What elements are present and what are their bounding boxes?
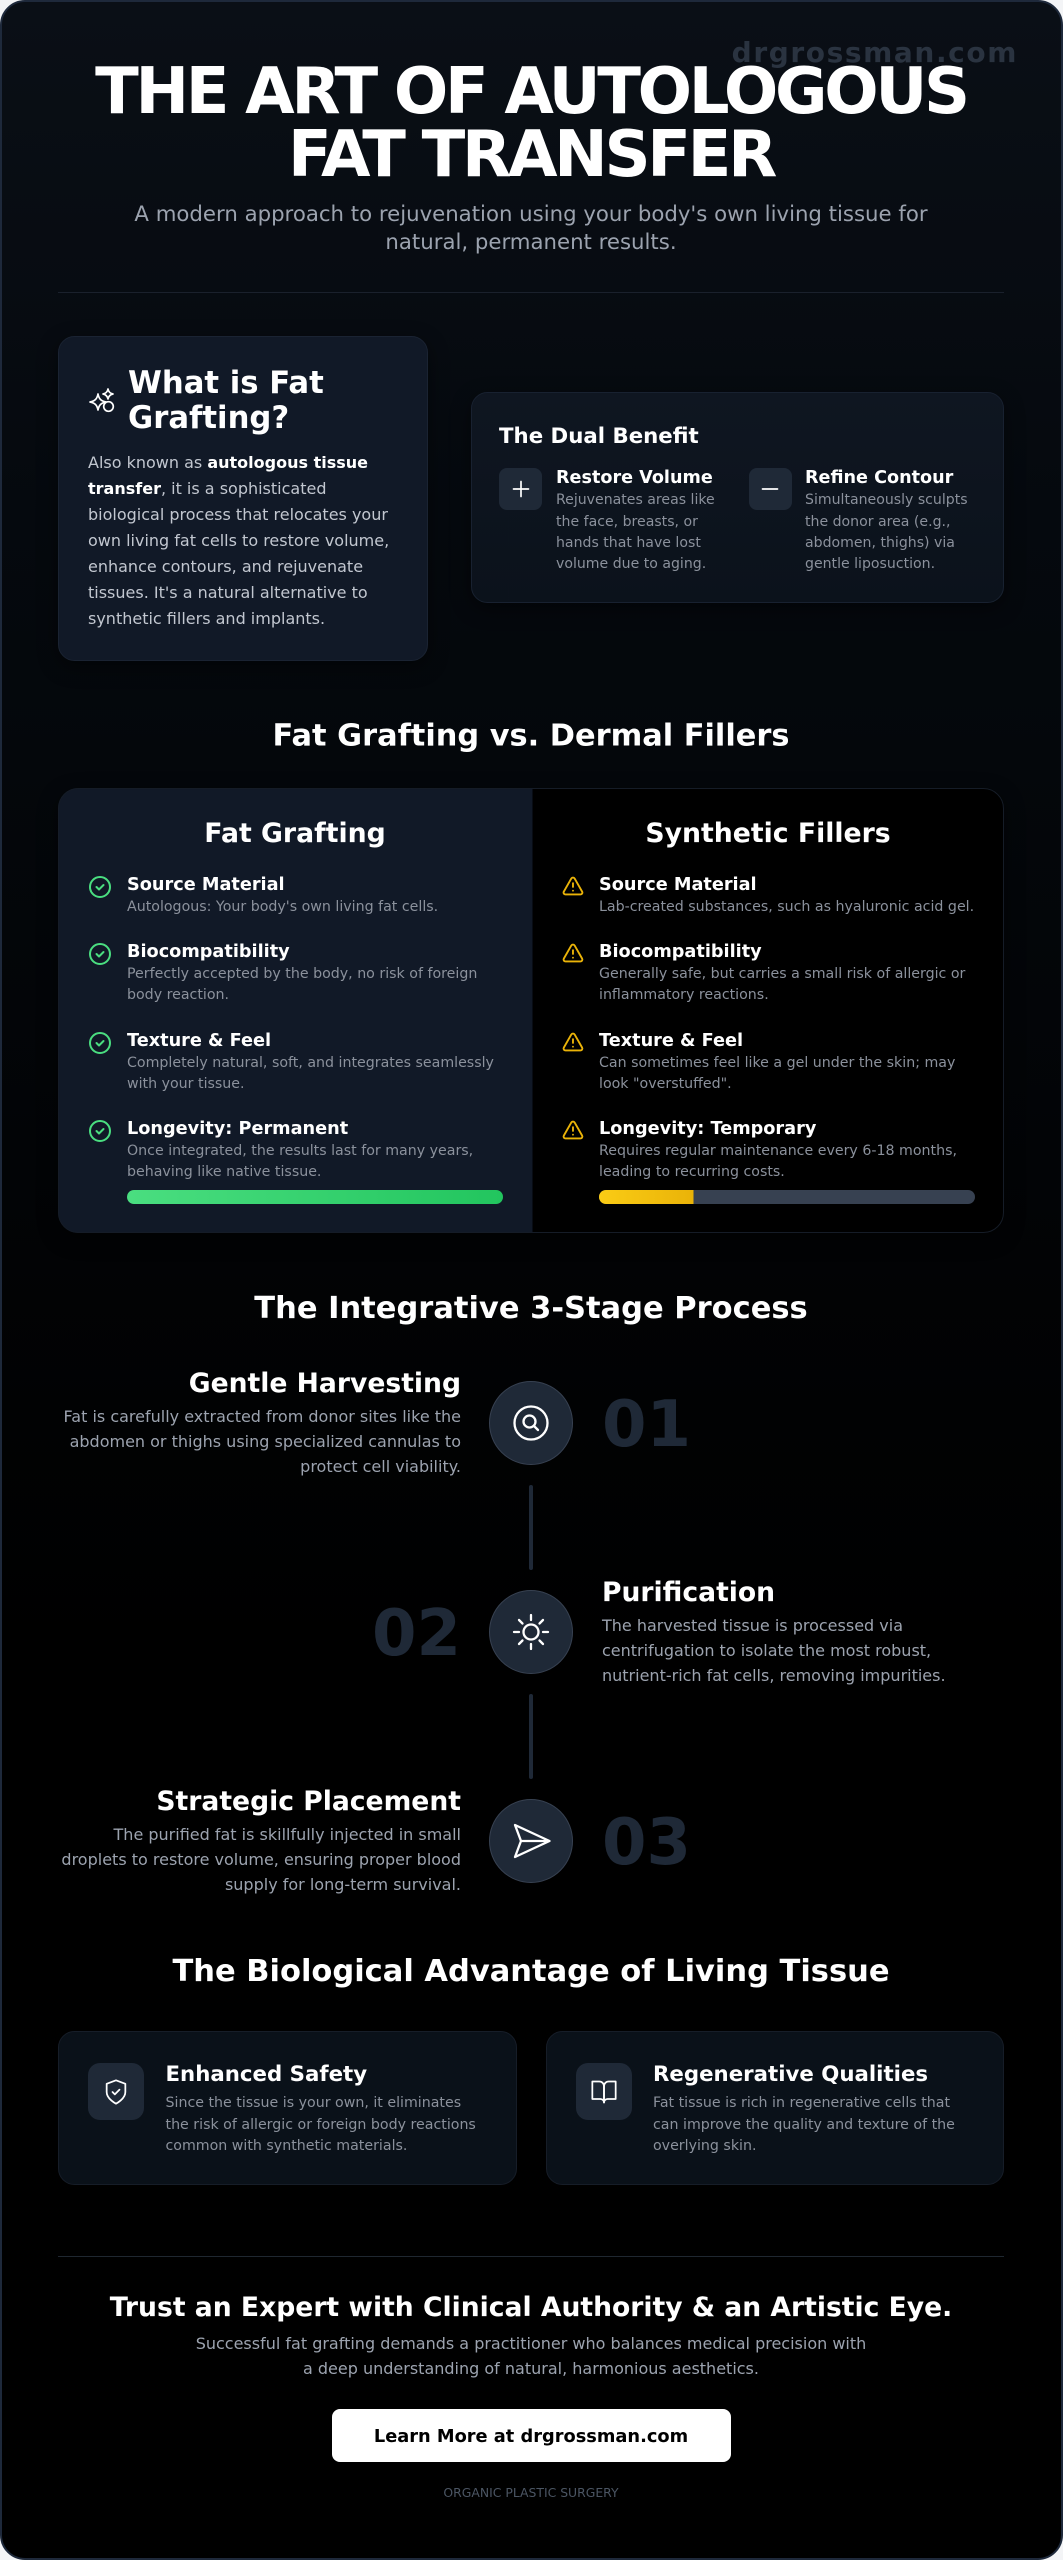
rows: Texture & Feel <box>127 1031 271 1051</box>
icon: sun <box>490 1590 572 1674</box>
icon: sparkles <box>90 389 113 411</box>
process timeline <box>61 1368 946 1894</box>
rows: Generally safe, but carries a small risk of allergic or <box>599 966 966 982</box>
rows: Longevity: Temporary <box>599 1119 817 1139</box>
restore volume: Restore Volume <box>556 468 713 488</box>
step 3 <box>61 1786 691 1894</box>
panel: enhanced safety: Enhanced Safety <box>166 2062 367 2087</box>
rows: body reaction. <box>127 987 229 1003</box>
rows: Completely natural, soft, and integrates seamlessly <box>127 1055 494 1071</box>
icon: paper plane <box>490 1800 572 1882</box>
panel: regenerative qualities: can improve the quality and texture of the <box>653 2117 955 2133</box>
refine contour: Refine Contour <box>805 468 954 488</box>
title <box>95 55 967 192</box>
panel: what is fat grafting <box>58 336 428 660</box>
rows: with your tissue. <box>127 1076 245 1092</box>
body text: transfer, it is a sophisticated <box>88 479 326 498</box>
step 3: supply for long-term survival. <box>225 1875 461 1894</box>
column: fat grafting: Fat Grafting <box>204 818 386 849</box>
step 2 <box>372 1577 946 1685</box>
panel: enhanced safety <box>58 2032 516 2184</box>
column: synthetic fillers: Synthetic Fillers <box>645 818 891 849</box>
rows: Longevity: Permanent <box>127 1119 349 1139</box>
rows: behaving like native tissue. <box>127 1164 321 1180</box>
rows: Autologous: Your body's own living fat cells. <box>127 899 438 915</box>
icon: shield <box>88 2063 144 2120</box>
step 2: Purification <box>602 1577 775 1608</box>
step 3: The purified fat is skillfully injected in small <box>113 1825 461 1844</box>
panel: comparison table <box>58 788 1004 1233</box>
longevity bar: temporary <box>599 1190 975 1204</box>
refine contour: Simultaneously sculpts <box>805 492 968 508</box>
body text: enhance contours, and rejuvenate <box>88 557 363 576</box>
rows: Lab-created substances, such as hyaluronic acid gel. <box>599 899 974 915</box>
step 3: droplets to restore volume, ensuring proper blood <box>61 1850 461 1869</box>
number 01: 01 <box>602 1388 691 1462</box>
subtitle: natural, permanent results. <box>385 230 677 255</box>
step 1: Fat is carefully extracted from donor sites like the <box>64 1407 461 1426</box>
panel: regenerative qualities: overlying skin. <box>653 2138 756 2154</box>
refine contour: gentle liposuction. <box>805 556 935 572</box>
rows: Source Material <box>599 875 757 895</box>
icon: search circle <box>490 1382 572 1464</box>
icon: book <box>576 2063 632 2120</box>
icon: minus <box>749 468 792 510</box>
step 1 <box>64 1368 691 1476</box>
refine contour: the donor area (e.g., <box>805 514 950 530</box>
step 3: Strategic Placement <box>156 1786 461 1817</box>
warning icons <box>564 878 582 1138</box>
heading: The Dual Benefit <box>499 424 699 449</box>
step 2: nutrient-rich fat cells, removing impurities. <box>602 1666 946 1685</box>
column: synthetic fillers <box>564 818 975 1204</box>
restore volume: Rejuvenates areas like <box>556 492 715 508</box>
longevity bar: permanent <box>127 1190 503 1204</box>
rows: Requires regular maintenance every 6-18 months, <box>599 1143 957 1159</box>
number 02: 02 <box>372 1597 461 1671</box>
rows: Biocompatibility <box>599 942 762 962</box>
heading: What is Fat <box>128 366 324 401</box>
heading <box>128 366 324 436</box>
title: THE ART OF AUTOLOGOUS <box>95 55 967 129</box>
title: FAT TRANSFER <box>288 118 776 192</box>
call to action text: a deep understanding of natural, harmonious aesthetics. <box>303 2359 759 2378</box>
step 1: protect cell viability. <box>300 1457 461 1476</box>
rows: Texture & Feel <box>599 1031 743 1051</box>
column: fat grafting <box>90 818 503 1204</box>
connector arrow 2 <box>529 1694 533 1779</box>
rows: Source Material <box>127 875 285 895</box>
heading: biological advantage: The Biological Advantage of Living Tissue <box>172 1954 890 1989</box>
step 2: centrifugation to isolate the most robust, <box>602 1641 931 1660</box>
call to action text <box>196 2334 866 2378</box>
restore volume: the face, breasts, or <box>556 514 698 530</box>
check icons <box>90 877 110 1141</box>
panel: enhanced safety: common with synthetic materials. <box>166 2138 407 2154</box>
rows <box>127 875 494 1180</box>
body text: biological process that relocates your <box>88 505 388 524</box>
number 03: 03 <box>602 1806 691 1880</box>
button <box>332 2409 731 2462</box>
body text: Also known as autologous tissue <box>88 453 368 472</box>
rows <box>599 875 974 1180</box>
panel: regenerative qualities <box>546 2032 1004 2184</box>
rows: Once integrated, the results last for many years, <box>127 1143 473 1159</box>
panel: enhanced safety: Since the tissue is your own, it eliminates <box>166 2095 461 2111</box>
icon: plus <box>499 468 542 510</box>
restore volume <box>556 468 715 572</box>
button: Learn More at drgrossman.com <box>374 2426 688 2447</box>
body text: tissues. It's a natural alternative to <box>88 583 368 602</box>
heading: process: The Integrative 3-Stage Process <box>254 1291 808 1326</box>
restore volume: volume due to aging. <box>556 556 706 572</box>
subtitle: A modern approach to rejuvenation using your body's own living tissue for <box>134 202 928 227</box>
rows: leading to recurring costs. <box>599 1164 785 1180</box>
watermark: drgrossman.com <box>732 36 1018 69</box>
refine contour <box>805 468 968 572</box>
footer: ORGANIC PLASTIC SURGERY <box>443 2485 619 2500</box>
rows: Biocompatibility <box>127 942 290 962</box>
subtitle <box>134 202 928 255</box>
refine contour: abdomen, thighs) via <box>805 535 955 551</box>
call to action text: Successful fat grafting demands a practitioner who balances medical precision with <box>196 2334 866 2353</box>
panel: regenerative qualities: Fat tissue is rich in regenerative cells that <box>653 2095 950 2111</box>
step 1: abdomen or thighs using specialized cannulas to <box>70 1432 461 1451</box>
connector arrow 1 <box>529 1485 533 1570</box>
restore volume: hands that have lost <box>556 535 701 551</box>
heading: Grafting? <box>128 401 289 436</box>
panel: enhanced safety: the risk of allergic or foreign body reactions <box>166 2117 476 2133</box>
body text <box>88 453 389 628</box>
rows: Can sometimes feel like a gel under the skin; may <box>599 1055 955 1071</box>
step 1: Gentle Harvesting <box>189 1368 461 1399</box>
heading: comparison: Fat Grafting vs. Dermal Fillers <box>273 718 789 754</box>
call to action heading: Trust an Expert with Clinical Authority & an Artistic Eye. <box>110 2292 952 2323</box>
body text: synthetic fillers and implants. <box>88 609 325 628</box>
body text: own living fat cells to restore volume, <box>88 531 389 550</box>
rows: Perfectly accepted by the body, no risk of foreign <box>127 966 477 982</box>
rows: look "overstuffed". <box>599 1076 732 1092</box>
panel: regenerative qualities: Regenerative Qualities <box>653 2062 928 2087</box>
step 2: The harvested tissue is processed via <box>601 1616 903 1635</box>
rows: inflammatory reactions. <box>599 987 769 1003</box>
panel: the dual benefit <box>472 392 1004 602</box>
